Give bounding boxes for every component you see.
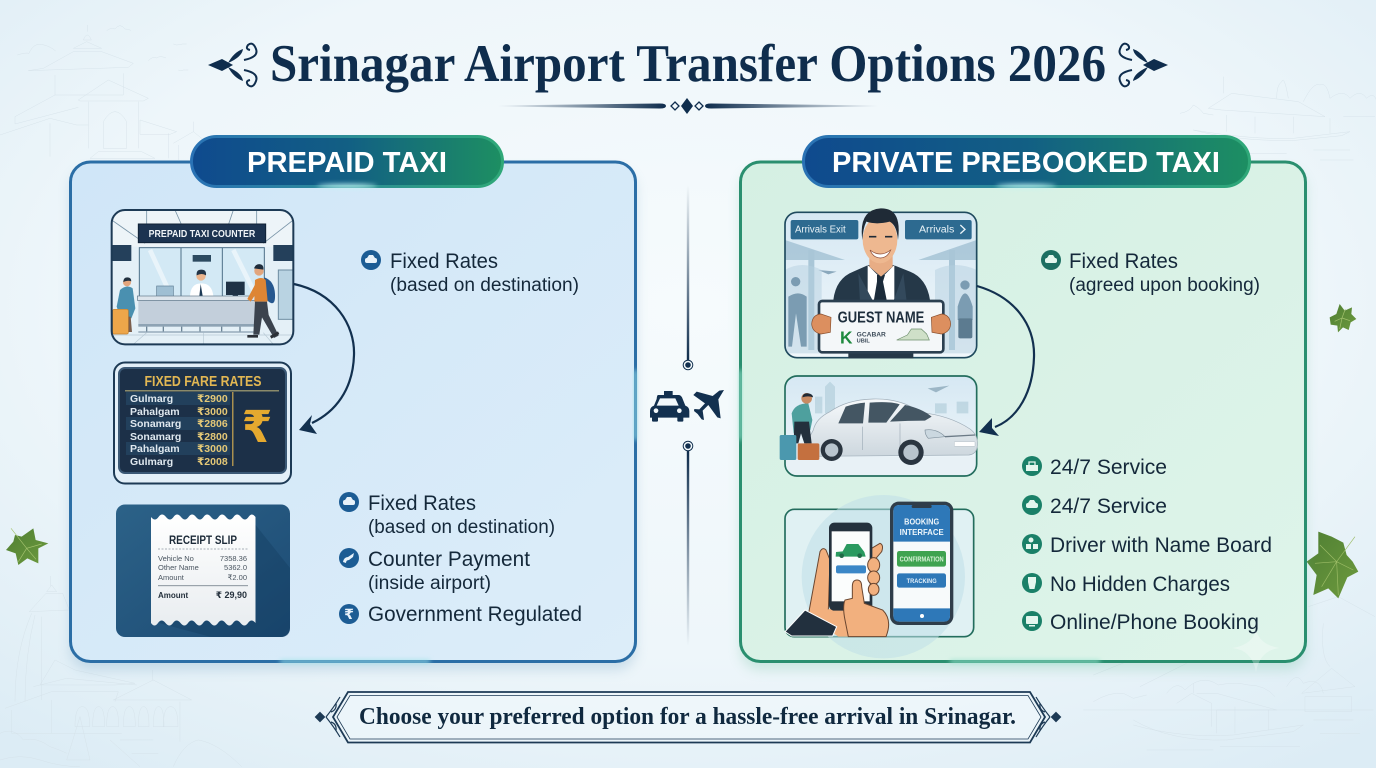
icon: car	[1022, 495, 1042, 515]
decorative leaf: lower right	[1307, 532, 1358, 598]
illustration: prepaid taxi counter: PREPAID TAXI COUNTER	[149, 229, 255, 240]
panel heading pill	[192, 136, 502, 188]
rear phone	[890, 502, 953, 625]
illustration: driver with name board: K	[840, 327, 853, 347]
illustration: fixed fare rates board: ₹3000	[197, 406, 228, 418]
illustration: receipt slip: 5362.0	[224, 563, 247, 572]
footer text: Choose your preferred option for a hassle-free arrival in Srinagar.	[359, 704, 1016, 730]
bullet: counter payment	[339, 548, 530, 594]
illustration: booking app on phones	[785, 495, 974, 658]
illustration: fixed fare rates board: Sonamarg	[130, 418, 181, 430]
illustration: receipt slip	[116, 504, 290, 637]
footer banner	[316, 692, 1060, 742]
illustration: car with luggage	[780, 376, 977, 477]
line art: mountain and shikara bottom right	[1083, 597, 1375, 750]
title text: Srinagar Airport Transfer Options 2026	[270, 35, 1106, 93]
icon: taxi	[1041, 250, 1061, 270]
bullet: fixed rates lower: (based on destination)	[368, 517, 555, 538]
panel background	[740, 162, 1306, 662]
bullet: driver with name board: Driver with Name Board	[1050, 534, 1272, 557]
bullet: fixed rates lower: Fixed Rates	[368, 492, 476, 515]
illustration: prepaid taxi counter	[112, 210, 293, 344]
illustration: fixed fare rates board: ₹2800	[197, 431, 228, 443]
line art: houseboat top right	[1180, 77, 1376, 160]
counter desk	[138, 300, 255, 324]
illustration: driver with name board: GCABAR	[857, 332, 886, 339]
panel heading pill	[804, 136, 1250, 188]
bullet: fixed rates top: (based on destination)	[390, 275, 579, 296]
illustration: driver with name board: UBIL	[857, 339, 870, 345]
illustration: fixed fare rates board: ₹2806	[197, 418, 228, 430]
bullet: 24/7 service second: 24/7 Service	[1050, 495, 1167, 518]
illustration: receipt slip: RECEIPT SLIP	[169, 533, 237, 547]
car body	[806, 399, 977, 456]
icon: airplane	[693, 390, 724, 420]
icon: monitor	[1022, 611, 1042, 631]
icon: taxi	[650, 391, 689, 422]
bullet: 24/7 service first: 24/7 Service	[1050, 456, 1167, 479]
illustration: booking app on phones: TRACKING	[907, 578, 937, 585]
panel heading pill: PREPAID TAXI	[247, 147, 447, 179]
illustration: fixed fare rates board: ₹3000	[197, 443, 228, 455]
illustration: receipt slip: 7358.36	[220, 554, 247, 563]
bullet: fixed rates top	[361, 250, 579, 296]
panel heading pill: PRIVATE PREBOOKED TAXI	[832, 147, 1220, 179]
illustration: fixed fare rates board: ₹	[242, 403, 272, 452]
illustration: fixed fare rates board: Pahalgam	[130, 406, 180, 418]
line art: temple top left	[0, 25, 210, 160]
arrow: driver to car	[977, 286, 1034, 436]
illustration: driver with name board: GUEST NAME	[838, 309, 924, 326]
decorative leaf: upper right	[1330, 304, 1356, 332]
bullet: fixed rates: (agreed upon booking)	[1069, 275, 1260, 296]
icon: car	[339, 492, 359, 512]
bullet: fixed rates	[1041, 250, 1260, 296]
icon: rupee	[339, 604, 359, 624]
icon: payment hand	[339, 548, 359, 568]
footer ornament right	[1036, 697, 1060, 737]
illustration: driver with name board: Arrivals	[919, 225, 954, 236]
illustration: fixed fare rates board: ₹2900	[197, 393, 228, 405]
illustration: booking app on phones: CONFIRMATION	[900, 556, 944, 563]
illustration: booking app on phones: BOOKING	[904, 517, 939, 527]
illustration: receipt slip: Other Name	[158, 563, 199, 572]
illustration: fixed fare rates board: Sonamarg	[130, 431, 181, 443]
line art: temple bottom left	[0, 576, 242, 767]
centre divider with transport icons	[650, 185, 724, 646]
title block	[208, 35, 1168, 114]
illustration: fixed fare rates board	[114, 362, 291, 484]
driver body	[833, 265, 930, 300]
illustration: fixed fare rates board: Gulmarg	[130, 393, 173, 405]
traveller right	[263, 277, 275, 303]
panel background	[70, 162, 636, 662]
icon: driver	[1022, 534, 1042, 554]
illustration: fixed fare rates board: ₹2008	[197, 456, 228, 468]
fingers and pointing hand	[868, 558, 880, 572]
panel: prepaid taxi	[70, 136, 637, 670]
illustration: receipt slip: Amount	[158, 573, 185, 582]
title ornament right	[1120, 44, 1168, 86]
icon: rupee: ₹	[344, 606, 354, 622]
arrow: counter to fare board	[294, 284, 354, 434]
name board	[819, 301, 943, 352]
bullet: counter payment: (inside airport)	[368, 573, 491, 594]
bullet: government regulated: Government Regulated	[368, 603, 582, 626]
decorative leaf: left	[6, 528, 48, 565]
illustration: receipt slip: ₹2.00	[228, 573, 247, 582]
icon: luggage	[1022, 456, 1042, 476]
front phone	[829, 523, 872, 611]
illustration: fixed fare rates board: Gulmarg	[130, 456, 173, 468]
driver loading luggage	[792, 403, 812, 433]
footer ornament left	[316, 697, 340, 737]
illustration: receipt slip: ₹ 29,90	[216, 590, 247, 600]
clerk	[190, 283, 213, 296]
illustration: driver with name board	[785, 208, 977, 358]
illustration: receipt slip: Vehicle No	[158, 554, 194, 563]
bullet: no hidden charges: No Hidden Charges	[1050, 573, 1230, 596]
icon: shield	[1022, 573, 1042, 593]
bullet: fixed rates lower	[339, 492, 555, 538]
hand behind front phone	[808, 549, 830, 630]
panel: private prebooked taxi	[739, 136, 1306, 672]
illustration: booking app on phones: INTERFACE	[900, 527, 944, 537]
title ornament left	[208, 44, 256, 86]
hands	[812, 314, 831, 334]
illustration: receipt slip: Amount	[158, 591, 189, 600]
illustration: fixed fare rates board: Pahalgam	[130, 443, 180, 455]
bullet: fixed rates top: Fixed Rates	[390, 250, 498, 273]
illustration: fixed fare rates board: FIXED FARE RATES	[144, 374, 262, 390]
bullet: fixed rates: Fixed Rates	[1069, 250, 1178, 273]
traveller left	[117, 287, 135, 318]
bullet: online phone booking: Online/Phone Booking	[1050, 611, 1259, 634]
icon: taxi	[361, 250, 381, 270]
illustration: driver with name board: Arrivals Exit	[795, 225, 846, 236]
bullet: counter payment: Counter Payment	[368, 548, 530, 571]
title underline	[498, 98, 878, 114]
